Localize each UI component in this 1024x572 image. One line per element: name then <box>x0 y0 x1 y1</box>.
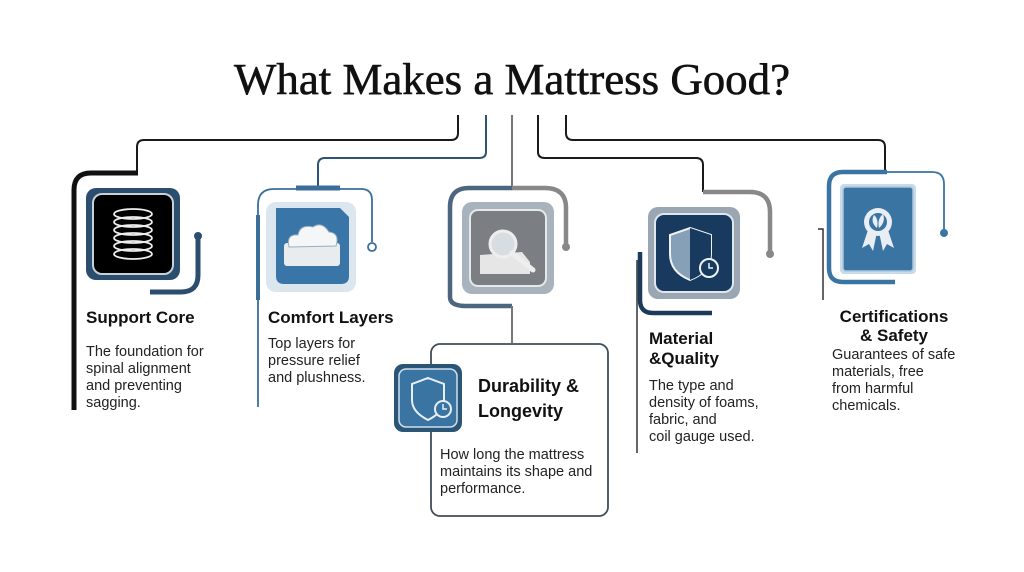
text: comfort layers description: and plushness. <box>268 370 366 386</box>
connector lines from title <box>137 115 885 192</box>
icon: shield with clock <box>648 207 740 299</box>
text: comfort layers description: pressure relief <box>268 353 361 369</box>
icon: award ribbon with leaf <box>840 184 916 274</box>
text: material description: The type and <box>649 378 734 394</box>
panel: certifications & safety <box>818 172 955 414</box>
text: support core description: sagging. <box>86 395 141 411</box>
panel: durability & longevity card: Longevity <box>478 401 563 421</box>
heading: material & quality: Material <box>649 329 713 348</box>
panel: durability & longevity card <box>394 344 608 516</box>
text: support core description: and preventing <box>86 378 182 394</box>
text: support core description: spinal alignment <box>86 361 191 377</box>
heading: comfort layers: Comfort Layers <box>268 308 394 327</box>
icon: shield with clock <box>394 364 462 432</box>
icon: magnifier over foam <box>462 202 554 294</box>
text: durability description: performance. <box>440 481 525 497</box>
text: comfort layers description: Top layers for <box>268 336 355 352</box>
panel: certifications & safety: & Safety <box>860 326 929 345</box>
title: What Makes a Mattress Good? <box>234 55 790 104</box>
heading: support core: Support Core <box>86 308 195 327</box>
panel: support core <box>74 173 204 411</box>
panel: comfort layers <box>258 188 394 407</box>
text: durability description: maintains its shape and <box>440 464 592 480</box>
text: durability description: How long the mattress <box>440 447 584 463</box>
heading: durability & longevity: Durability & <box>478 376 579 396</box>
text: material description: density of foams, <box>649 395 759 411</box>
panel: material & quality <box>637 192 774 453</box>
text: material description: fabric, and <box>649 412 717 428</box>
text: material description: coil gauge used. <box>649 429 755 445</box>
text: support core description: The foundation for <box>86 344 204 360</box>
text: certifications description: materials, free <box>832 364 924 380</box>
icon: coil spring <box>86 188 180 280</box>
text: certifications description: chemicals. <box>832 398 900 414</box>
text: certifications description: Guarantees of safe <box>832 347 955 363</box>
panel: material & quality: &Quality <box>649 349 719 368</box>
icon: cloud on mattress <box>266 202 356 292</box>
panel: durability icon (magnifier) <box>450 188 570 343</box>
text: certifications description: from harmful <box>832 381 913 397</box>
heading: certifications & safety: Certifications <box>840 307 948 326</box>
